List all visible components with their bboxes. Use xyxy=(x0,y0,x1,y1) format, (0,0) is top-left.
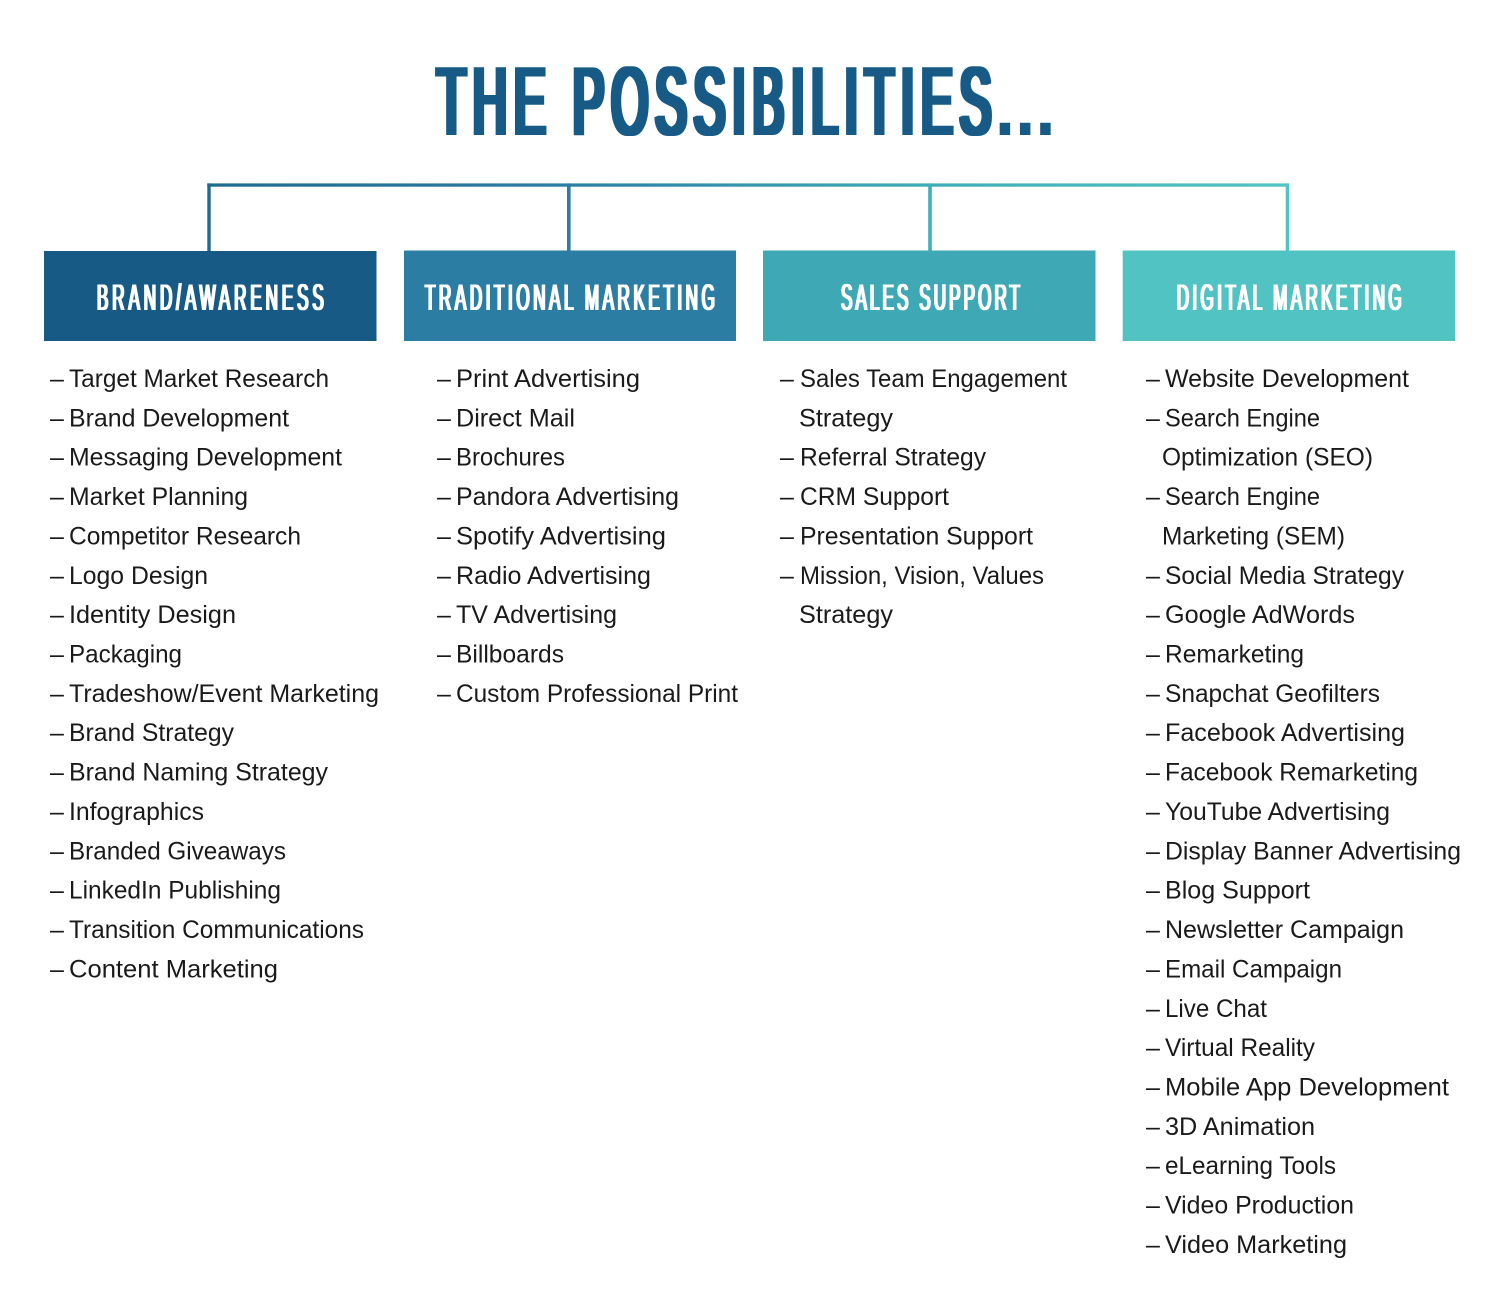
list: Digital Marketing services: Social Media Strategy xyxy=(1165,562,1404,590)
list: Traditional Marketing services: – xyxy=(437,640,451,668)
list: Digital Marketing services: – xyxy=(1146,562,1160,590)
list: Sales Support services: Mission, Vision, Values xyxy=(800,562,1044,590)
list: Digital Marketing services: Mobile App Development xyxy=(1165,1074,1449,1102)
list: Traditional Marketing services: Pandora Advertising xyxy=(456,483,679,511)
list: Brand/Awareness services: – xyxy=(50,365,64,393)
list: Digital Marketing services: Video Production xyxy=(1165,1192,1354,1220)
list: Traditional Marketing services: – xyxy=(437,562,451,590)
list: Traditional Marketing services: Direct Mail xyxy=(456,404,575,432)
list: Brand/Awareness services: Market Planning xyxy=(69,483,248,511)
panel header: Digital Marketing xyxy=(1123,250,1455,341)
list: Brand/Awareness services: Competitor Research xyxy=(69,522,301,550)
list: Brand/Awareness services: Infographics xyxy=(69,798,204,826)
list: Digital Marketing services: Website Development xyxy=(1165,365,1409,393)
list: Traditional Marketing services: – xyxy=(437,404,451,432)
list: Digital Marketing services: Facebook Remarketing xyxy=(1165,759,1418,787)
list: Digital Marketing services: Blog Support xyxy=(1165,877,1310,905)
list: Brand/Awareness services: – xyxy=(50,562,64,590)
list: Traditional Marketing services: Brochures xyxy=(456,444,565,472)
list: Sales Support services: Presentation Support xyxy=(800,522,1033,550)
list: Sales Support services: – xyxy=(780,365,794,393)
list: Digital Marketing services: Video Marketing xyxy=(1165,1231,1347,1259)
list: Digital Marketing services: Remarketing xyxy=(1165,640,1304,668)
list: Digital Marketing services: Newsletter Campaign xyxy=(1165,916,1404,944)
list: Brand/Awareness services: – xyxy=(50,483,64,511)
list: Traditional Marketing services: – xyxy=(437,365,451,393)
panel header: Traditional Marketing: TRADITIONAL MARKETING xyxy=(425,278,715,319)
panel header: Sales Support xyxy=(763,250,1096,341)
list: Traditional Marketing services: Billboards xyxy=(456,640,564,668)
list: Traditional Marketing services: TV Advertising xyxy=(456,601,617,629)
list: Brand/Awareness services: – xyxy=(50,680,64,708)
list: Brand/Awareness services: Brand Naming Strategy xyxy=(69,759,328,787)
list: Brand/Awareness services: Tradeshow/Event Marketing xyxy=(69,680,379,708)
list: Sales Support services: Sales Team Engagement xyxy=(800,365,1067,393)
list: Digital Marketing services: – xyxy=(1146,365,1160,393)
list: Digital Marketing services: eLearning Tools xyxy=(1165,1152,1336,1180)
panel header: Brand/Awareness xyxy=(44,251,376,341)
list: Digital Marketing services: Search Engine xyxy=(1165,483,1320,511)
list: Traditional Marketing services: Print Advertising xyxy=(456,365,640,393)
list: Digital Marketing services: – xyxy=(1146,798,1160,826)
list: Brand/Awareness services: LinkedIn Publishing xyxy=(69,877,281,905)
list: Traditional Marketing services: – xyxy=(437,444,451,472)
list: Digital Marketing services: Display Banner Advertising xyxy=(1165,837,1461,865)
list: Brand/Awareness services: – xyxy=(50,640,64,668)
list: Sales Support services xyxy=(780,365,1067,629)
list: Brand/Awareness services: – xyxy=(50,719,64,747)
list: Sales Support services: Strategy xyxy=(799,404,893,432)
list: Brand/Awareness services: Packaging xyxy=(69,640,182,668)
list: Digital Marketing services xyxy=(1146,365,1461,1259)
list: Digital Marketing services: Search Engine xyxy=(1165,404,1320,432)
list: Traditional Marketing services: Spotify Advertising xyxy=(456,522,666,550)
list: Sales Support services: CRM Support xyxy=(800,483,949,511)
list: Digital Marketing services: 3D Animation xyxy=(1165,1113,1315,1141)
list: Traditional Marketing services: – xyxy=(437,522,451,550)
connector lines xyxy=(207,183,1289,251)
list: Digital Marketing services: – xyxy=(1146,1231,1160,1259)
list: Brand/Awareness services: – xyxy=(50,759,64,787)
list: Sales Support services: – xyxy=(780,522,794,550)
list: Brand/Awareness services: Brand Strategy xyxy=(69,719,234,747)
list: Sales Support services: – xyxy=(780,562,794,590)
list: Brand/Awareness services: Target Market Research xyxy=(69,365,329,393)
list: Digital Marketing services: – xyxy=(1146,1192,1160,1220)
list: Brand/Awareness services xyxy=(50,365,379,983)
list: Digital Marketing services: – xyxy=(1146,955,1160,983)
list: Digital Marketing services: Google AdWords xyxy=(1165,601,1355,629)
list: Digital Marketing services: – xyxy=(1146,601,1160,629)
list: Brand/Awareness services: Identity Design xyxy=(69,601,236,629)
list: Brand/Awareness services: – xyxy=(50,916,64,944)
list: Brand/Awareness services: – xyxy=(50,798,64,826)
list: Brand/Awareness services: – xyxy=(50,955,64,983)
list: Brand/Awareness services: – xyxy=(50,601,64,629)
list: Digital Marketing services: – xyxy=(1146,680,1160,708)
list: Brand/Awareness services: Logo Design xyxy=(69,562,208,590)
list: Digital Marketing services: Optimization (SEO) xyxy=(1162,444,1373,472)
list: Traditional Marketing services: – xyxy=(437,483,451,511)
list: Digital Marketing services: – xyxy=(1146,1152,1160,1180)
list: Traditional Marketing services: – xyxy=(437,601,451,629)
list: Digital Marketing services: – xyxy=(1146,640,1160,668)
list: Traditional Marketing services: Custom Professional Print xyxy=(456,680,738,708)
list: Brand/Awareness services: Transition Communications xyxy=(69,916,364,944)
list: Digital Marketing services: – xyxy=(1146,877,1160,905)
panel header: Sales Support: SALES SUPPORT xyxy=(841,278,1020,319)
list: Digital Marketing services: Email Campaign xyxy=(1165,955,1342,983)
list: Brand/Awareness services: – xyxy=(50,877,64,905)
list: Digital Marketing services: – xyxy=(1146,1113,1160,1141)
panel header: Brand/Awareness: BRAND/AWARENESS xyxy=(97,278,324,319)
list: Brand/Awareness services: – xyxy=(50,404,64,432)
list: Digital Marketing services: Snapchat Geofilters xyxy=(1165,680,1380,708)
list: Sales Support services: – xyxy=(780,483,794,511)
list: Digital Marketing services: – xyxy=(1146,837,1160,865)
list: Digital Marketing services: – xyxy=(1146,916,1160,944)
list: Sales Support services: Referral Strategy xyxy=(800,444,986,472)
list: Digital Marketing services: – xyxy=(1146,1034,1160,1062)
list: Traditional Marketing services xyxy=(437,365,738,708)
list: Brand/Awareness services: Content Marketing xyxy=(69,955,278,983)
list: Digital Marketing services: – xyxy=(1146,995,1160,1023)
list: Digital Marketing services: Facebook Advertising xyxy=(1165,719,1405,747)
list: Digital Marketing services: – xyxy=(1146,719,1160,747)
list: Brand/Awareness services: Brand Development xyxy=(69,404,289,432)
panel header: Digital Marketing: DIGITAL MARKETING xyxy=(1177,278,1402,319)
list: Sales Support services: – xyxy=(780,444,794,472)
list: Digital Marketing services: – xyxy=(1146,759,1160,787)
list: Digital Marketing services: Virtual Reality xyxy=(1165,1034,1315,1062)
panel header: Traditional Marketing xyxy=(404,250,736,341)
list: Brand/Awareness services: Messaging Development xyxy=(69,444,342,472)
list: Brand/Awareness services: Branded Giveaways xyxy=(69,837,286,865)
title: THE POSSIBILITIES... xyxy=(437,49,1052,156)
list: Digital Marketing services: YouTube Advertising xyxy=(1165,798,1390,826)
list: Digital Marketing services: Live Chat xyxy=(1165,995,1267,1023)
list: Traditional Marketing services: – xyxy=(437,680,451,708)
list: Brand/Awareness services: – xyxy=(50,837,64,865)
list: Brand/Awareness services: – xyxy=(50,444,64,472)
list: Digital Marketing services: – xyxy=(1146,483,1160,511)
list: Brand/Awareness services: – xyxy=(50,522,64,550)
list: Digital Marketing services: – xyxy=(1146,404,1160,432)
list: Digital Marketing services: – xyxy=(1146,1074,1160,1102)
list: Traditional Marketing services: Radio Advertising xyxy=(456,562,651,590)
list: Sales Support services: Strategy xyxy=(799,601,893,629)
list: Digital Marketing services: Marketing (SEM) xyxy=(1162,522,1345,550)
